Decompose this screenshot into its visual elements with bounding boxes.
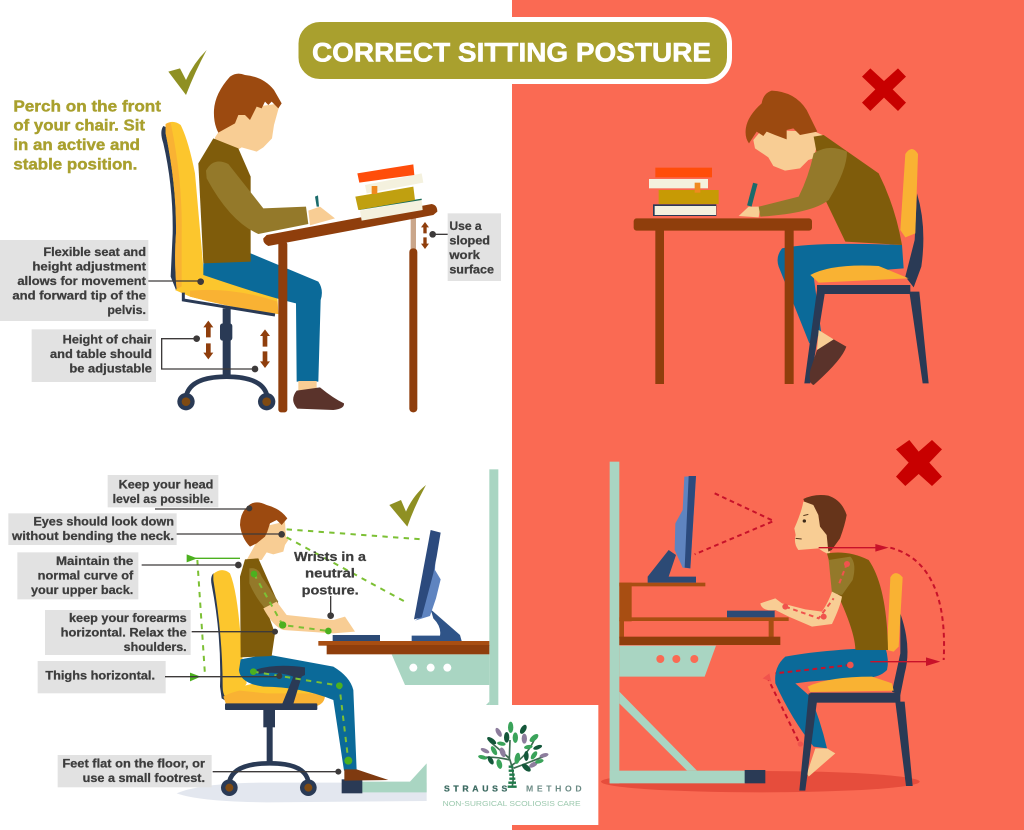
monitor [412,530,462,641]
logo text: METHOD [526,783,582,793]
instruction text: Perch on the front [13,99,161,116]
callout: sloped work surface: sloped [449,233,490,247]
floor shadow [601,771,920,792]
callout: flexible seat [0,240,204,321]
office chair [161,122,278,410]
logo: Strauss Method [430,705,598,825]
seated person [239,502,388,781]
slouching person [760,495,894,791]
callout: sloped work surface: Use a [449,219,482,233]
callout: flexible seat: height adjustment [32,260,146,274]
callout: eyes: without bending the neck. [11,529,174,543]
callout: flexible seat: Flexible seat and [43,245,146,259]
desk and footrest [177,469,498,802]
callout: upper back: Maintain the [56,554,134,568]
logo text [443,783,582,808]
callout: sloped work surface [429,213,501,281]
flat desk and books [634,168,812,384]
callout: head level [108,475,252,511]
callout: height of chair and table [32,329,258,382]
callout: feet: use a small footrest. [83,771,205,785]
icon: red cross [862,68,906,111]
instruction text [13,99,161,173]
callout: upper back: your upper back. [31,583,133,597]
desk frame [610,462,789,783]
hunched person [739,91,909,385]
callout: flexible seat: allows for movement [17,274,146,288]
logo tree [478,722,549,787]
callout: upper back [17,552,242,599]
instruction text: of your chair. Sit [13,118,145,135]
icon: check mark [168,50,207,95]
callout: feet: Feet flat on the floor, or [62,757,205,771]
title banner [296,20,730,82]
callout: thighs: Thighs horizontal. [45,668,155,682]
callout: wrists: neutral [305,567,355,581]
panel: incorrect posture at desk [634,68,929,385]
callout: feet [58,755,341,787]
callout: upper back: normal curve of [38,568,134,582]
callout: forearms: horizontal. Relax the [61,625,187,639]
callout: head level: Keep your head [119,477,213,491]
panel: correct posture at desk [0,50,501,412]
callout: thighs [38,661,282,693]
callout: forearms [45,610,278,655]
background: incorrect side [512,0,1024,830]
callout: wrists: posture. [302,583,359,597]
callout: flexible seat: and forward tip of the [12,289,146,303]
title banner: CORRECT SITTING POSTURE [312,38,711,68]
callout: wrists: Wrists in a [294,550,367,564]
callout: eyes [8,513,285,545]
callout: flexible seat: pelvis. [107,303,146,317]
seated person [198,74,344,410]
callout: height of chair and table: and table should [50,347,152,361]
sloped desk with books [263,164,437,412]
incorrect alignment guides [695,493,944,747]
office chair [211,570,325,796]
callout: sloped work surface: work [448,248,480,262]
chair [810,573,913,786]
panel: incorrect posture at computer [601,440,944,792]
callout: forearms: keep your forearms [69,611,187,625]
callout: height of chair and table: Height of chair [63,332,152,346]
callout: head level: level as possible. [113,492,213,506]
icon: check mark [389,485,426,527]
callout: eyes: Eyes should look down [33,515,174,529]
callout: forearms: shoulders. [124,640,187,654]
adjustment arrows [203,222,429,368]
instruction text: in an active and [13,137,140,154]
callout: wrists [294,550,367,619]
monitor [648,476,696,583]
callout: sloped work surface: surface [449,262,494,276]
callout: height of chair and table: be adjustable [69,361,152,375]
icon: red cross [896,440,942,486]
chair [817,149,929,383]
instruction text: stable position. [13,156,137,173]
logo text: STRAUSS [444,783,508,793]
panel: correct posture at computer [8,469,498,802]
alignment guides [187,529,422,765]
logo text: NON-SURGICAL SCOLIOSIS CARE [443,801,581,808]
